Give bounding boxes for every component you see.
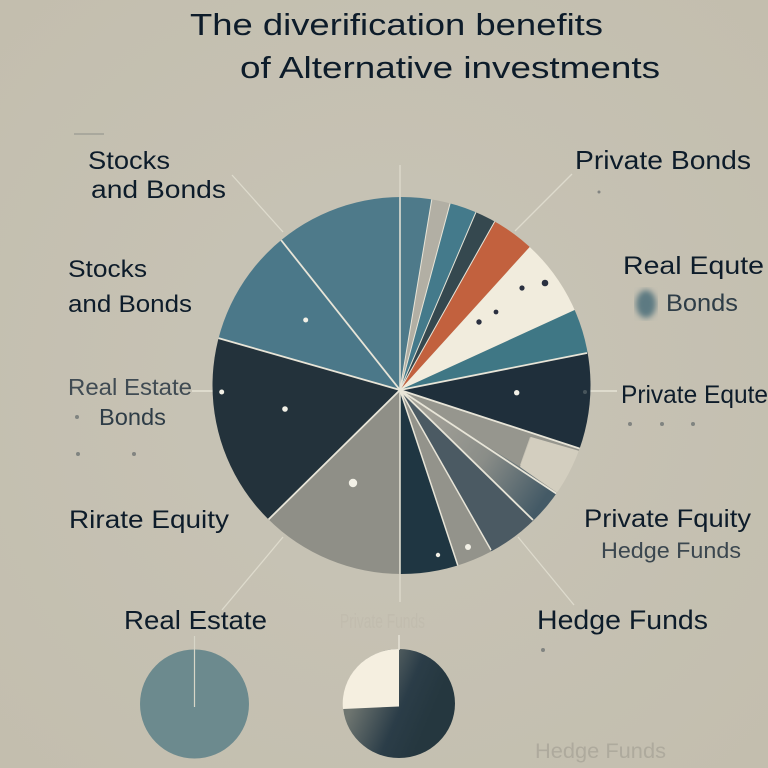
slice: right teal [404, 310, 588, 388]
title: of Alternative investments [240, 50, 660, 85]
slice: mid gray [403, 397, 492, 566]
label: real equte bonds: Real Equte [623, 252, 764, 280]
title: The diverification benefits [190, 7, 603, 42]
label: stocks and bonds top left: and Bonds [91, 176, 226, 204]
label: stocks and bonds left: Stocks [68, 256, 147, 283]
slice: left teal [218, 240, 398, 388]
illegible specks [74, 133, 695, 652]
slice: right navy [403, 352, 590, 448]
label: hedge funds bottom: Hedge Funds [537, 605, 708, 635]
label: stocks and bonds left [68, 256, 192, 318]
label: private fquity hedge funds: Hedge Funds [601, 538, 741, 563]
slice: pale beige block [520, 437, 579, 492]
slice: gray to slate [408, 396, 556, 520]
label: private bonds: Private Bonds [575, 145, 751, 175]
label: stocks and bonds top left: Stocks [88, 147, 170, 175]
label: private fquity hedge funds: Private Fquity [584, 505, 752, 533]
label: real estate bonds left: Real Estate [68, 374, 192, 400]
slice: cream [401, 247, 574, 389]
data dots [219, 280, 587, 557]
slice: top teal [281, 197, 432, 388]
slice: large navy [212, 338, 398, 520]
leader lines [192, 165, 617, 610]
slice: teal sliver [402, 204, 476, 384]
label: faint hedge funds: Hedge Funds [535, 740, 666, 763]
label: real equte bonds: Bonds [666, 290, 738, 317]
label: real estate bonds left: Bonds [99, 404, 166, 430]
label: real estate bonds left [68, 374, 192, 430]
label: private equte: Private Equte [621, 381, 768, 409]
slice: dark slate [403, 394, 534, 552]
label: ghost text: Private Funds [340, 611, 425, 633]
small pie: real estate [140, 636, 249, 758]
slice: bottom navy [400, 394, 458, 574]
icon: blurred smudge [636, 290, 656, 318]
slice: beige sliver [402, 200, 450, 378]
label: stocks and bonds top left [88, 147, 226, 204]
small pie: dark and cream [343, 635, 455, 758]
slice: orange [402, 222, 530, 388]
slice: large gray [268, 392, 400, 574]
slice: right gray [406, 393, 580, 493]
label: rirate equity: Rirate Equity [69, 506, 230, 534]
label: real estate bottom: Real Estate [124, 605, 267, 635]
main pie chart [212, 197, 590, 574]
label: private fquity hedge funds [584, 505, 752, 563]
label: real equte bonds [623, 252, 764, 317]
slice: dark sliver [403, 212, 495, 384]
title [190, 7, 660, 85]
label: stocks and bonds left: and Bonds [68, 291, 192, 318]
